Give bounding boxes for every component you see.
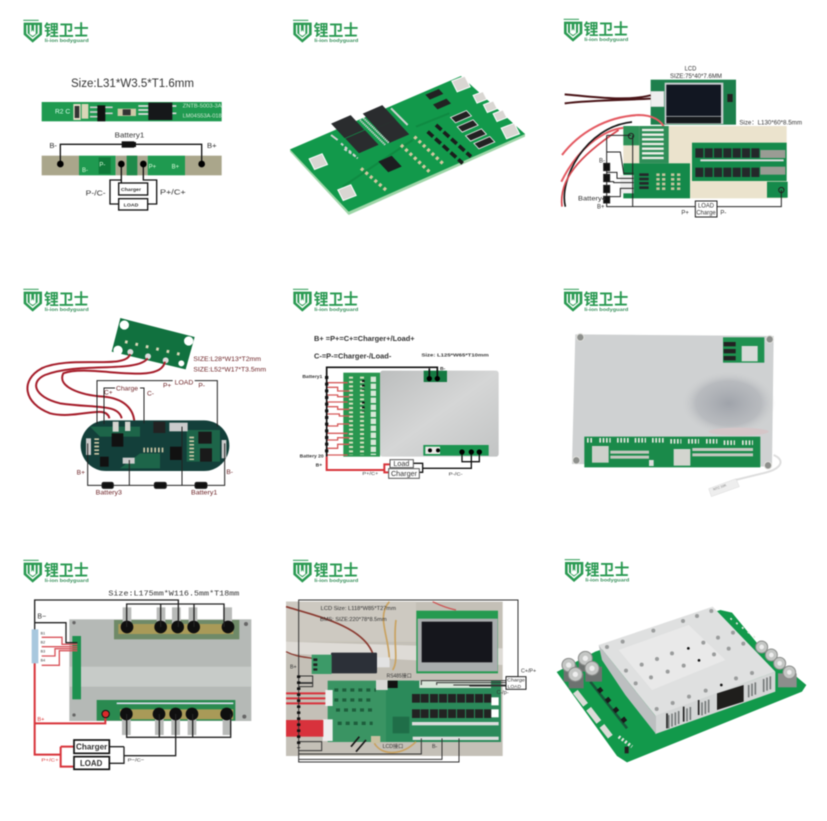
logo [293, 560, 359, 583]
logo: li-ion bodyguard [314, 307, 359, 312]
wiring labels: B4 [41, 658, 45, 662]
green circuit board [290, 76, 525, 215]
green BMS board [323, 680, 501, 743]
logo [293, 289, 359, 312]
equation headings [314, 336, 415, 360]
size label: Size: L125*W65*T10mm [421, 352, 489, 358]
panel: aluminium plate product photo [564, 289, 781, 497]
dimension and port labels: C+/P+ [521, 668, 536, 674]
logo: li-ion bodyguard [45, 307, 89, 312]
wiring labels: Battery1 [302, 374, 323, 380]
wiring labels: B3 [41, 650, 45, 654]
logo: li-ion bodyguard [314, 578, 359, 583]
charger box [119, 183, 148, 195]
dimension and port labels: LCD Size: L118*W85*T27mm [321, 606, 397, 612]
dimension and port labels: B+ [290, 665, 297, 671]
logo: li-ion bodyguard [584, 37, 629, 42]
wiring labels [578, 120, 802, 216]
red positive wire [327, 457, 390, 472]
resistors and control IC [361, 89, 495, 190]
LCD module [651, 80, 736, 125]
logo [23, 560, 89, 583]
wiring labels: B- [599, 159, 605, 165]
bottom PCB strip: B- [82, 168, 88, 174]
left terminal posts [562, 651, 602, 688]
load and charge box: LOAD [698, 203, 715, 209]
panel: 3S PCB product photo [290, 20, 525, 215]
top PCB strip: LM04S53A-018 [183, 113, 222, 119]
corner screws [573, 334, 773, 469]
dimension and port labels: C-/p- [497, 690, 509, 696]
battery terminal dots [294, 675, 304, 748]
size labels: SIZE:L28*W13*T2mm [193, 357, 261, 363]
LCD module [416, 611, 498, 673]
logo: li-ion bodyguard [584, 307, 629, 312]
bottom PCB strip [42, 156, 222, 175]
wiring labels: C- [147, 390, 154, 397]
logo: 锂卫士 [314, 22, 358, 40]
charger box [74, 740, 109, 753]
panel: LCD with 4S BMS board [561, 19, 802, 217]
logo: 锂卫士 [44, 22, 89, 40]
charger box [389, 469, 419, 478]
logo [564, 289, 629, 312]
wiring labels: P+/C+ [362, 471, 378, 477]
battery and terminal labels [49, 130, 217, 197]
MOSFET rows [412, 694, 499, 740]
load and charge box: Charge [696, 211, 716, 217]
logo: 锂卫士 [44, 562, 89, 580]
top PCB strip: R2 C [55, 108, 70, 115]
cell wiring [604, 133, 784, 207]
load box: LOAD [80, 758, 102, 768]
wiring labels: Battery3 [96, 490, 122, 497]
charger and load box: LOAD [508, 684, 522, 689]
panel: large terminal board wiring [23, 560, 251, 769]
wiring labels: B+ [37, 717, 45, 723]
wiring labels: B+ [316, 463, 322, 469]
dimension and port labels: RS485接口 [387, 671, 412, 679]
wiring labels: Charge [116, 385, 138, 392]
LCD label: SIZE:75*40*7.6MM [670, 74, 722, 80]
top PCB strip [42, 102, 222, 121]
black wiring frame [299, 600, 518, 762]
load box: LOAD [124, 202, 139, 208]
photo background [286, 602, 503, 756]
panel: oval board with balance board [23, 289, 266, 497]
charger box: Charger [391, 471, 418, 478]
bottom PCB strip: P+ [149, 165, 157, 171]
size labels: SIZE:L52*W17*T3.5mm [193, 367, 266, 373]
balancing ladder [642, 130, 664, 158]
load and charge box [695, 201, 717, 217]
charger box: Charger [121, 187, 141, 193]
silver chip leads [331, 108, 408, 158]
load box [74, 757, 109, 769]
balance board [112, 318, 195, 369]
logo: 锂卫士 [585, 561, 629, 579]
cell balance wires [327, 383, 349, 455]
size heading: Size:L31*W3.5*T1.6mm [71, 76, 194, 90]
logo: li-ion bodyguard [314, 38, 359, 43]
wiring labels: B- [226, 469, 233, 476]
panel: heatsink BMS product photo [557, 560, 806, 762]
logo [565, 560, 630, 582]
panel: 20S aluminium board wiring [293, 289, 499, 478]
MOSFET rows [620, 148, 785, 193]
wiring labels: LOAD [175, 379, 194, 386]
wiring labels: P+ [681, 210, 689, 216]
red wiring [32, 629, 109, 767]
dimension and port labels: B- [432, 744, 438, 750]
wiring labels: P- [720, 210, 726, 216]
wiring labels: Battery4 [578, 197, 607, 203]
panel: 1S strip protection board wiring [23, 20, 222, 210]
wiring labels: B2 [41, 640, 45, 644]
wiring lines [88, 381, 225, 488]
red ribbon wires [286, 693, 416, 753]
size heading: Size:L175mm*W116.5mm*T18mm [108, 590, 240, 598]
right terminal posts [756, 641, 797, 687]
RS485 USB adapter [312, 653, 390, 674]
battery and terminal labels: Battery1 [115, 130, 144, 139]
load box [390, 460, 413, 468]
top terminal lugs [121, 607, 234, 633]
negative wire to P- pads [413, 449, 482, 472]
logo: 锂卫士 [584, 21, 628, 39]
cable and temperature sensor: NTC 10K [713, 483, 728, 492]
loose wires [286, 602, 456, 670]
wiring labels: Battery1 [191, 490, 218, 497]
aluminium board [69, 619, 251, 721]
wiring labels [300, 366, 463, 478]
wiring labels: B- [440, 366, 446, 372]
battery and terminal labels: P-/C- [86, 188, 106, 197]
battery terminals and B- wire [327, 367, 440, 457]
charger and load box: Charge [507, 677, 525, 682]
aluminium plate [572, 334, 775, 467]
red and black wires [561, 94, 665, 207]
equation headings: B+ =P+=C+=Charger+/Load+ [314, 336, 415, 343]
black wiring [35, 600, 231, 763]
dimension and port labels [290, 606, 536, 750]
green circuit board [557, 610, 806, 762]
wiring diagram [57, 141, 205, 204]
panel: BMS with LCD and RS485 photo [286, 560, 536, 762]
dimension and port labels: BMS: SIZE:220*78*8.5mm [320, 617, 387, 623]
charger and load box [506, 677, 526, 689]
wiring labels: B+ [77, 470, 85, 477]
size labels [193, 357, 266, 373]
load box: Load [393, 461, 409, 468]
aluminium plate [380, 371, 499, 457]
battery and terminal labels: B- [49, 141, 57, 150]
bottom PCB strip: P- [99, 163, 105, 169]
wiring labels: Battery 20 [300, 453, 324, 459]
battery and terminal labels: B+ [207, 141, 217, 150]
BMS main board [623, 126, 788, 198]
wiring labels: P+/C+ [41, 758, 59, 764]
wiring labels: C+ [104, 390, 113, 397]
red wires [27, 354, 165, 422]
heatsink screw holes [605, 609, 754, 711]
wiring labels: P- [198, 383, 205, 390]
cable and temperature sensor [709, 455, 781, 497]
charger box: Charger [76, 742, 108, 752]
equation headings: C-=P-=Charger-/Load- [314, 353, 392, 360]
wiring labels: P-/C- [449, 472, 463, 478]
solder pads [309, 76, 520, 201]
wiring labels [77, 379, 233, 497]
battery and terminal labels: P+/C+ [160, 188, 186, 197]
load box [119, 199, 148, 210]
bottom green PCB [584, 437, 760, 467]
logo: li-ion bodyguard [585, 577, 630, 582]
logo: 锂卫士 [44, 291, 89, 309]
logo: li-ion bodyguard [45, 38, 89, 43]
wiring labels: B+ [597, 204, 605, 210]
LCD label [670, 67, 722, 80]
wiring labels: B− [37, 614, 46, 621]
oval circuit board [81, 420, 229, 471]
top PCB strip: ZNTB-5003-3A [183, 103, 222, 109]
wiring labels: B1 [41, 632, 45, 636]
wiring labels: P+ [163, 383, 171, 390]
heatsink black vents [687, 647, 723, 686]
MOSFET chips [331, 105, 409, 153]
green PCB column [343, 373, 380, 457]
dimension and port labels: LCD接口 [383, 742, 403, 750]
logo [23, 20, 89, 43]
logo: 锂卫士 [584, 291, 628, 309]
heatsink front fins [599, 645, 775, 734]
logo [23, 289, 89, 312]
logo [564, 19, 629, 42]
logo: li-ion bodyguard [45, 578, 89, 583]
bottom terminal lugs [120, 708, 233, 735]
wiring labels [37, 614, 144, 764]
LCD label: LCD [685, 67, 697, 73]
logo [293, 20, 359, 43]
wiring labels: Size：L130*60*8.5mm [739, 120, 802, 126]
bottom PCB strip: B+ [172, 165, 180, 171]
heatsink top face [599, 607, 775, 716]
logo: 锂卫士 [314, 291, 358, 309]
wiring labels: P−/C− [128, 758, 144, 764]
top-right green notch [723, 337, 764, 363]
logo: 锂卫士 [314, 562, 358, 580]
